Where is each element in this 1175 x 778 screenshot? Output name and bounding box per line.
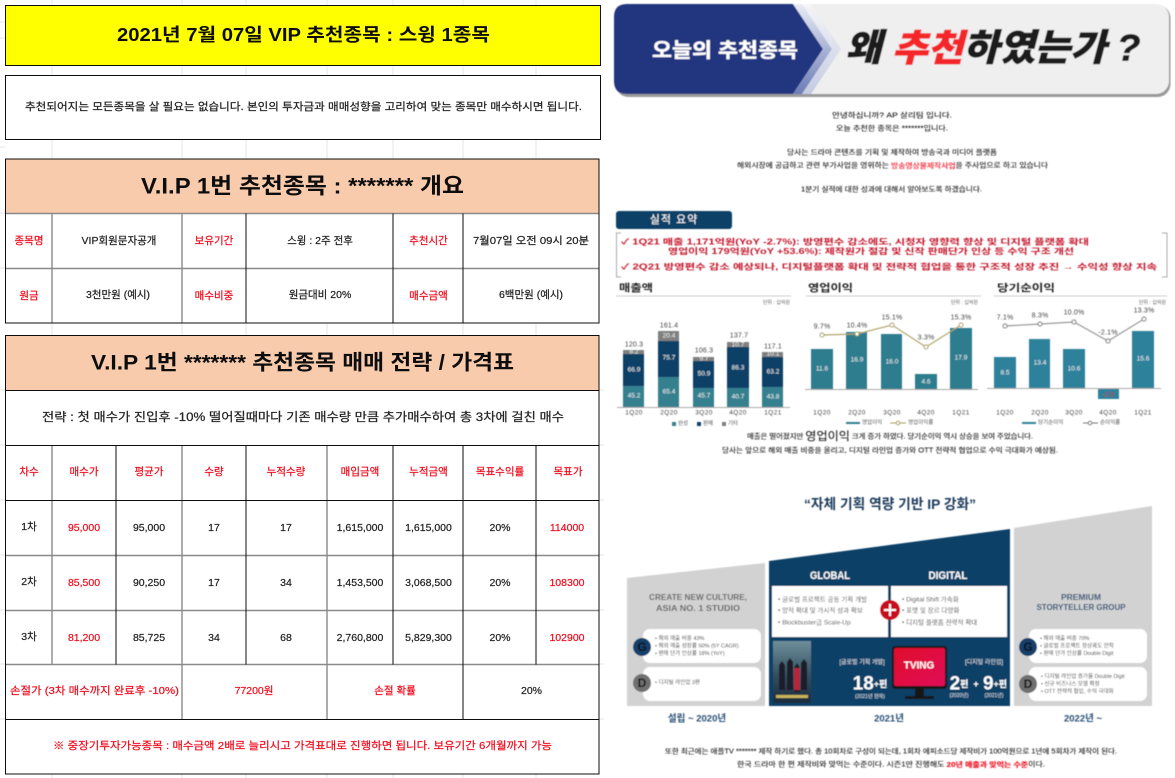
price row 2: 2차 bbox=[21, 576, 37, 588]
price row 2: 34 bbox=[280, 577, 292, 589]
digital lineup count: + bbox=[973, 679, 979, 689]
banner chevron accent two bbox=[802, 4, 841, 94]
price row 2: 85,500 bbox=[68, 577, 100, 589]
panel: yellow title banner bbox=[6, 6, 600, 66]
intro text: 오늘 추천한 종목은 *******입니다. bbox=[836, 124, 948, 132]
overview row 2: 원금 bbox=[19, 290, 39, 302]
timeline year labels: 2022년 ~ bbox=[1064, 712, 1102, 724]
revenue value labels: 120.3 bbox=[625, 342, 643, 348]
intro text bbox=[737, 110, 1049, 194]
icon: TVING monitor: TVING bbox=[904, 660, 934, 672]
price row 3 bbox=[21, 631, 585, 644]
price table header: 누적금액 bbox=[409, 466, 448, 478]
revenue axis labels bbox=[625, 410, 782, 416]
chart: revenue stacked bars: 매출액 bbox=[619, 282, 653, 294]
overview row 2 bbox=[19, 288, 563, 302]
price row 3: 102900 bbox=[549, 632, 585, 644]
digital lineup count: (2020년) bbox=[949, 692, 969, 699]
intro text: 해외시장에 공급하고 관련 부가사업을 영위하는 방송영상물제작사업 을 주사업으로 하고 있습니다 bbox=[737, 160, 1049, 170]
revenue axis labels: 3Q20 bbox=[695, 410, 713, 416]
stop loss row: 손절 확률 bbox=[374, 684, 416, 697]
founding panel global box bbox=[633, 629, 761, 663]
operating profit labels: 4.6 bbox=[921, 378, 931, 386]
intro text: 1분기 실적에 대한 성과에 대해서 알아보도록 하겠습니다. bbox=[801, 184, 982, 194]
net income labels: 4Q20 bbox=[1099, 410, 1117, 416]
digital lineup count: [디지털 라인업] bbox=[965, 658, 1003, 666]
overview row 1: VIP회원문자공개 bbox=[82, 235, 156, 247]
chart: revenue stacked bars: 단위 : 십억원 bbox=[763, 299, 790, 306]
operating profit labels: 9.7% bbox=[814, 324, 830, 330]
net income labels: 8.3% bbox=[1032, 312, 1048, 320]
results summary callout bbox=[616, 233, 1167, 277]
price row 2: 20% bbox=[489, 577, 511, 589]
operating profit labels: 4Q20 bbox=[917, 410, 935, 416]
revenue value labels: 137.7 bbox=[730, 332, 748, 340]
price row 1: 1,615,000 bbox=[405, 522, 452, 534]
net income labels: 13.3% bbox=[1134, 308, 1154, 314]
panel: 2021 global and digital bbox=[769, 529, 1010, 706]
price row 3: 2,760,800 bbox=[337, 632, 384, 644]
results summary callout: 영업이익 179억원(YoY +53.6%): 제작원가 절감 및 신작 판매단가 인상 등 수익 구조 개선 bbox=[668, 246, 1074, 256]
net income legend bbox=[1022, 418, 1120, 426]
global drama count: 18+편 bbox=[853, 674, 887, 694]
price table header: 평균가 bbox=[135, 466, 164, 478]
2022 digital box: • OTT 전략적 협업, 수익 극대화 bbox=[1041, 687, 1114, 695]
revenue value labels: 45.2 bbox=[628, 392, 641, 400]
net income labels bbox=[996, 308, 1154, 416]
panel: strategy and price table bbox=[6, 336, 599, 774]
founding panel digital box: D bbox=[638, 676, 647, 690]
net income bars bbox=[994, 331, 1154, 399]
revenue value labels: 10.1 bbox=[767, 350, 780, 358]
digital lineup count: 9+편 bbox=[983, 674, 1007, 694]
price table header: 누적수량 bbox=[267, 466, 306, 478]
operating profit labels: 15.3% bbox=[951, 314, 971, 322]
operating profit legend: 영업이익 bbox=[862, 418, 882, 426]
results commentary: 매출은 떨어졌지만 영업이익 크게 증가 하였다. 당기순이익 역시 상승을 보여 주었습니다. bbox=[747, 430, 1033, 443]
revenue value labels: 50.9 bbox=[698, 370, 711, 378]
2022 digital box: • 신규 비즈니스 모델 확장 bbox=[1041, 680, 1100, 688]
digital bullet box bbox=[891, 586, 1007, 637]
founding panel slogan: ASIA NO. 1 STUDIO bbox=[656, 603, 740, 613]
IP strategy heading: “자체 기획 역량 기반 IP 강화” bbox=[804, 496, 976, 512]
revenue value labels: 117.1 bbox=[764, 344, 782, 350]
section tag: results summary: 실적 요약 bbox=[650, 212, 698, 226]
operating profit legend bbox=[846, 418, 933, 426]
net income labels: 10.0% bbox=[1064, 310, 1084, 316]
digital heading: DIGITAL bbox=[928, 570, 968, 582]
price row 2 bbox=[21, 576, 585, 589]
price table header: 매수가 bbox=[70, 466, 99, 478]
overview row 2: 원금대비 20% bbox=[289, 289, 351, 301]
2022 digital box: • 디지털 라인업 증가율 Double Digit bbox=[1041, 672, 1125, 680]
overview row 1: 종목명 bbox=[15, 235, 43, 247]
digital bullet box: • 포맷 및 장르 다양화 bbox=[902, 606, 959, 614]
operating profit labels: 15.1% bbox=[882, 314, 902, 322]
operating profit labels: 10.4% bbox=[847, 322, 867, 330]
intro text: 안녕하십니까? AP 살리팀 입니다. bbox=[832, 110, 952, 120]
price row 3: 5,829,300 bbox=[405, 632, 452, 644]
operating profit labels: 16.0 bbox=[886, 358, 899, 366]
global heading: GLOBAL bbox=[810, 570, 850, 582]
chart: net income: 당기순이익 bbox=[997, 282, 1055, 294]
overview row 1 bbox=[15, 234, 589, 247]
chart: net income bbox=[987, 282, 1167, 426]
price row 3: 34 bbox=[208, 632, 220, 644]
price table grey rules bbox=[6, 446, 599, 720]
revenue legend: 완성 bbox=[678, 419, 688, 427]
chart: operating profit bbox=[805, 282, 981, 426]
2022 digital box bbox=[1019, 667, 1147, 701]
digital lineup count: 2편 bbox=[950, 674, 968, 694]
price row 2: 90,250 bbox=[133, 577, 165, 589]
price row 3: 20% bbox=[489, 632, 511, 644]
price row 1: 114000 bbox=[550, 522, 584, 534]
2022 global box: • 글로벌 프로젝트 정상궤도 안착 bbox=[1040, 642, 1114, 650]
global drama count: (2021년 현재) bbox=[855, 693, 885, 700]
operating profit legend: 영업이익률 bbox=[908, 418, 933, 426]
operating profit labels: 11.6 bbox=[816, 366, 828, 372]
global bullet box: • Blockbuster급 Scale-Up bbox=[778, 618, 851, 626]
overview row 1: 보유기간 bbox=[195, 235, 234, 247]
price row 1 bbox=[21, 521, 584, 534]
mid-term note: ※ 중장기투자가능종목 : 매수금액 2배로 늘리시고 가격표대로 진행하면 됩니다. 보유기간 6개월까지 가능 bbox=[53, 739, 552, 752]
chart: revenue stacked bars bbox=[616, 282, 791, 427]
net income labels: -2.9 bbox=[1102, 392, 1114, 398]
operating profit labels: 3.3% bbox=[918, 334, 934, 342]
overview table grid bbox=[6, 214, 599, 323]
revenue value labels bbox=[625, 322, 782, 400]
revenue bars bbox=[623, 331, 783, 407]
overview row 1: 추천시간 bbox=[409, 235, 448, 247]
founding panel slogan bbox=[649, 592, 747, 613]
revenue legend bbox=[672, 419, 738, 427]
operating profit labels bbox=[813, 314, 971, 416]
price row 2: 17 bbox=[208, 577, 220, 589]
section tag: results summary bbox=[616, 211, 732, 229]
price row 1: 17 bbox=[208, 522, 220, 534]
founding panel global box: G bbox=[637, 640, 647, 654]
revenue value labels: 20.4 bbox=[663, 332, 676, 340]
price row 2: 3,068,500 bbox=[405, 577, 452, 589]
revenue value labels: 75.7 bbox=[663, 354, 676, 362]
operating margin line bbox=[820, 323, 963, 349]
revenue axis labels: 1Q20 bbox=[625, 410, 643, 416]
panel: notice bbox=[6, 76, 600, 140]
revenue legend: 기타 bbox=[728, 419, 738, 427]
banner headline: 왜 추천하였는가 ? bbox=[846, 28, 1140, 68]
price table header: 수량 bbox=[204, 466, 224, 478]
operating profit labels: 1Q20 bbox=[813, 410, 831, 416]
price table grid bbox=[6, 336, 599, 774]
global bullet box: • 양적 확대 및 가시적 성과 확보 bbox=[778, 606, 863, 614]
strategy description: 전략 : 첫 매수가 진입후 -10% 떨어질때마다 기존 매수량 만큼 추가매수하여 총 3차에 걸친 매수 bbox=[42, 410, 564, 424]
operating profit bars bbox=[811, 328, 972, 389]
2022 global box: • 판매 단가 인상률 Double Digit bbox=[1040, 649, 1114, 657]
net income labels: 1Q20 bbox=[996, 410, 1014, 416]
price row 1: 17 bbox=[280, 522, 292, 534]
overview row 2: 6백만원 (예시) bbox=[499, 288, 563, 301]
digital lineup count bbox=[949, 658, 1007, 699]
banner blue chevron bbox=[614, 4, 823, 94]
revenue axis labels: 2Q20 bbox=[660, 410, 678, 416]
founding panel global box: • 판매 단가 인상률 18% (YoY) bbox=[655, 649, 725, 657]
closing commentary bbox=[665, 746, 1117, 768]
drama poster bbox=[773, 641, 811, 703]
founding panel slogan: CREATE NEW CULTURE, bbox=[649, 592, 747, 602]
panel: 2022 onward bbox=[1014, 506, 1152, 706]
global bullet box bbox=[772, 586, 888, 637]
2022 global box: • 해외 매출 비중 70% bbox=[1040, 634, 1090, 642]
founding panel digital box bbox=[633, 667, 761, 701]
overview row 1: 7월07일 오전 09시 20분 bbox=[473, 234, 589, 247]
timeline year labels: 2021년 bbox=[874, 712, 904, 724]
price row 1: 95,000 bbox=[68, 522, 100, 534]
revenue value labels: 106.3 bbox=[695, 348, 713, 354]
revenue value labels: 63.2 bbox=[767, 368, 780, 376]
net income legend: 당기순이익 bbox=[1038, 418, 1063, 426]
price row 1: 1,615,000 bbox=[337, 522, 384, 534]
revenue value labels: 8.2 bbox=[629, 348, 639, 356]
banner left label: 오늘의 추천종목 bbox=[652, 39, 798, 62]
premium slogan: PREMIUM bbox=[1061, 592, 1101, 602]
overview table frame bbox=[6, 159, 599, 323]
operating profit labels: 2Q20 bbox=[848, 410, 866, 416]
operating profit labels: 1Q21 bbox=[952, 410, 970, 416]
icon: TVING monitor bbox=[892, 646, 947, 699]
net income legend: 순이익률 bbox=[1100, 418, 1120, 426]
price row 1: 1차 bbox=[21, 521, 37, 533]
net income labels: 13.4 bbox=[1034, 360, 1047, 366]
operating profit labels: 16.9 bbox=[851, 356, 864, 364]
net income labels: 1Q21 bbox=[1134, 410, 1152, 416]
revenue legend: 판매 bbox=[703, 419, 713, 427]
panel: overview table bbox=[6, 159, 599, 323]
founding panel global box: • 해외 매출 성장률 50% (5Y CAGR) bbox=[655, 642, 739, 650]
revenue value labels: 161.4 bbox=[660, 322, 678, 330]
overview row 2: 3천만원 (예시) bbox=[86, 288, 150, 301]
net income labels: 7.1% bbox=[997, 314, 1013, 322]
net income labels: 2Q20 bbox=[1031, 410, 1049, 416]
net income labels: 3Q20 bbox=[1065, 410, 1083, 416]
revenue axis labels: 4Q20 bbox=[729, 410, 747, 416]
left column bbox=[6, 6, 600, 774]
chart: operating profit: 단위 : 십억원 bbox=[951, 299, 978, 306]
price table header: 매입금액 bbox=[341, 465, 379, 478]
net income labels: 8.5 bbox=[1000, 370, 1010, 376]
plus icon bbox=[880, 600, 900, 620]
banner chevron accent one bbox=[793, 4, 832, 94]
stop loss row: 손절가 (3차 매수까지 완료후 -10%) bbox=[10, 684, 179, 697]
price row 3: 85,725 bbox=[133, 632, 165, 644]
digital bullet box: • Digital Shift 가속화 bbox=[902, 594, 959, 604]
global drama count: [글로벌 기획 개발] bbox=[839, 658, 885, 666]
founding panel global box: • 해외 매출 비중 43% bbox=[655, 634, 705, 642]
results summary callout: ✓ 1Q21 매출 1,171억원(YoY -2.7%): 방영편수 감소에도, 시청자 영향력 향상 및 디지털 플랫폼 확대 bbox=[621, 236, 1089, 246]
operating profit labels: 3Q20 bbox=[883, 410, 901, 416]
panel: founding to 2020 bbox=[627, 563, 765, 706]
digital lineup count: (2021년) bbox=[984, 692, 1004, 699]
net margin line bbox=[1003, 317, 1146, 343]
founding panel digital box: • 디지털 라인업 3편 bbox=[655, 678, 700, 686]
banner: why recommended bbox=[614, 4, 1170, 97]
revenue value labels: 10.7 bbox=[732, 342, 745, 348]
intro text: 당사는 드라마 콘텐츠를 기획 및 제작하여 방송국과 미디어 플랫폼 bbox=[787, 148, 998, 156]
price row 2: 108300 bbox=[549, 577, 585, 589]
notice text: 추천되어지는 모든종목을 살 필요는 없습니다. 본인의 투자금과 매매성향을 고리하여 맞는 종목만 매수하시면 됩니다. bbox=[25, 100, 582, 113]
price row 3: 3차 bbox=[21, 631, 37, 643]
right column bbox=[614, 4, 1170, 768]
global drama count bbox=[839, 658, 887, 700]
overview heading: V.I.P 1번 추천종목 : ******* 개요 bbox=[141, 174, 464, 198]
operating profit labels: 17.9 bbox=[955, 354, 968, 362]
net income labels: -2.1% bbox=[1098, 330, 1118, 336]
revenue axis labels: 1Q21 bbox=[764, 410, 782, 416]
price row 1: 20% bbox=[489, 522, 511, 534]
price row 3: 81,200 bbox=[68, 632, 100, 644]
results summary callout: ✓ 2Q21 방영편수 감소 예상되나, 디지털플랫폼 확대 및 전략적 협업을 통한 구조적 성장 추진 → 수익성 향상 지속 bbox=[621, 262, 1158, 272]
title: 2021년 7월 07일 VIP 추천종목 : 스윙 1종목 bbox=[117, 25, 490, 45]
revenue value labels: 66.9 bbox=[628, 366, 641, 374]
stop loss row: 20% bbox=[521, 685, 542, 697]
results commentary: 당사는 앞으로 해외 매출 비중을 올리고, 디지털 라인업 증가와 OTT 전략적 협업으로 수익 극대화가 예상됨. bbox=[722, 446, 1058, 454]
revenue value labels: 40.7 bbox=[732, 394, 745, 400]
revenue value labels: 86.3 bbox=[732, 364, 745, 372]
results commentary bbox=[722, 430, 1058, 454]
overview row 2: 매수비중 bbox=[195, 290, 234, 302]
2022 global box: G bbox=[1023, 640, 1033, 654]
price row 1: 95,000 bbox=[133, 522, 165, 534]
timeline year labels bbox=[668, 712, 1102, 724]
revenue value labels: 9.7 bbox=[699, 356, 709, 362]
revenue value labels: 45.7 bbox=[698, 392, 711, 400]
timeline year labels: 설립 ~ 2020년 bbox=[668, 712, 726, 724]
digital bullet box: • 디지털 플랫폼 전략적 확대 bbox=[902, 618, 977, 626]
overview row 2: 매수금액 bbox=[409, 290, 448, 302]
stop loss row bbox=[10, 684, 542, 697]
2022 digital box: D bbox=[1024, 677, 1033, 691]
price table header: 목표수익률 bbox=[476, 466, 524, 478]
revenue value labels: 65.4 bbox=[663, 388, 676, 396]
price row 2: 1,453,500 bbox=[337, 577, 384, 589]
chart: net income: 단위 : 십억원 bbox=[1139, 299, 1166, 306]
net income labels: 10.6 bbox=[1068, 366, 1081, 372]
global bullet box: • 글로벌 프로젝트 공동 기획 개발 bbox=[778, 594, 867, 604]
price table header: 목표가 bbox=[554, 466, 583, 478]
net income labels: 15.6 bbox=[1137, 356, 1150, 362]
2022 global box bbox=[1019, 629, 1147, 663]
chart: operating profit: 영업이익 bbox=[808, 282, 853, 294]
premium slogan bbox=[1036, 592, 1126, 612]
strategy heading: V.I.P 1번 ******* 추천종목 매매 전략 / 가격표 bbox=[91, 352, 514, 374]
closing commentary: 한국 드라마 한 편 제작비와 맞먹는 수준이다. 시즌1만 진행해도 20년 매출과 맞먹는 수준 이다. bbox=[737, 760, 1045, 768]
overview row 1: 스윙 : 2주 전후 bbox=[287, 235, 353, 247]
price table header: 차수 bbox=[19, 466, 39, 478]
stop loss row: 77200원 bbox=[235, 685, 273, 697]
price row 3: 68 bbox=[280, 632, 292, 644]
revenue value labels: 43.8 bbox=[767, 394, 780, 400]
closing commentary: 또한 최근에는 애플TV ******* 제작 하기로 했다. 총 10회차로 구성이 되는데, 1회차 에피소드당 제작비가 100억원으로 1년에 5회차가 제작이 된다. bbox=[665, 746, 1117, 756]
price table header bbox=[19, 465, 583, 478]
premium slogan: STORYTELLER GROUP bbox=[1036, 602, 1126, 612]
